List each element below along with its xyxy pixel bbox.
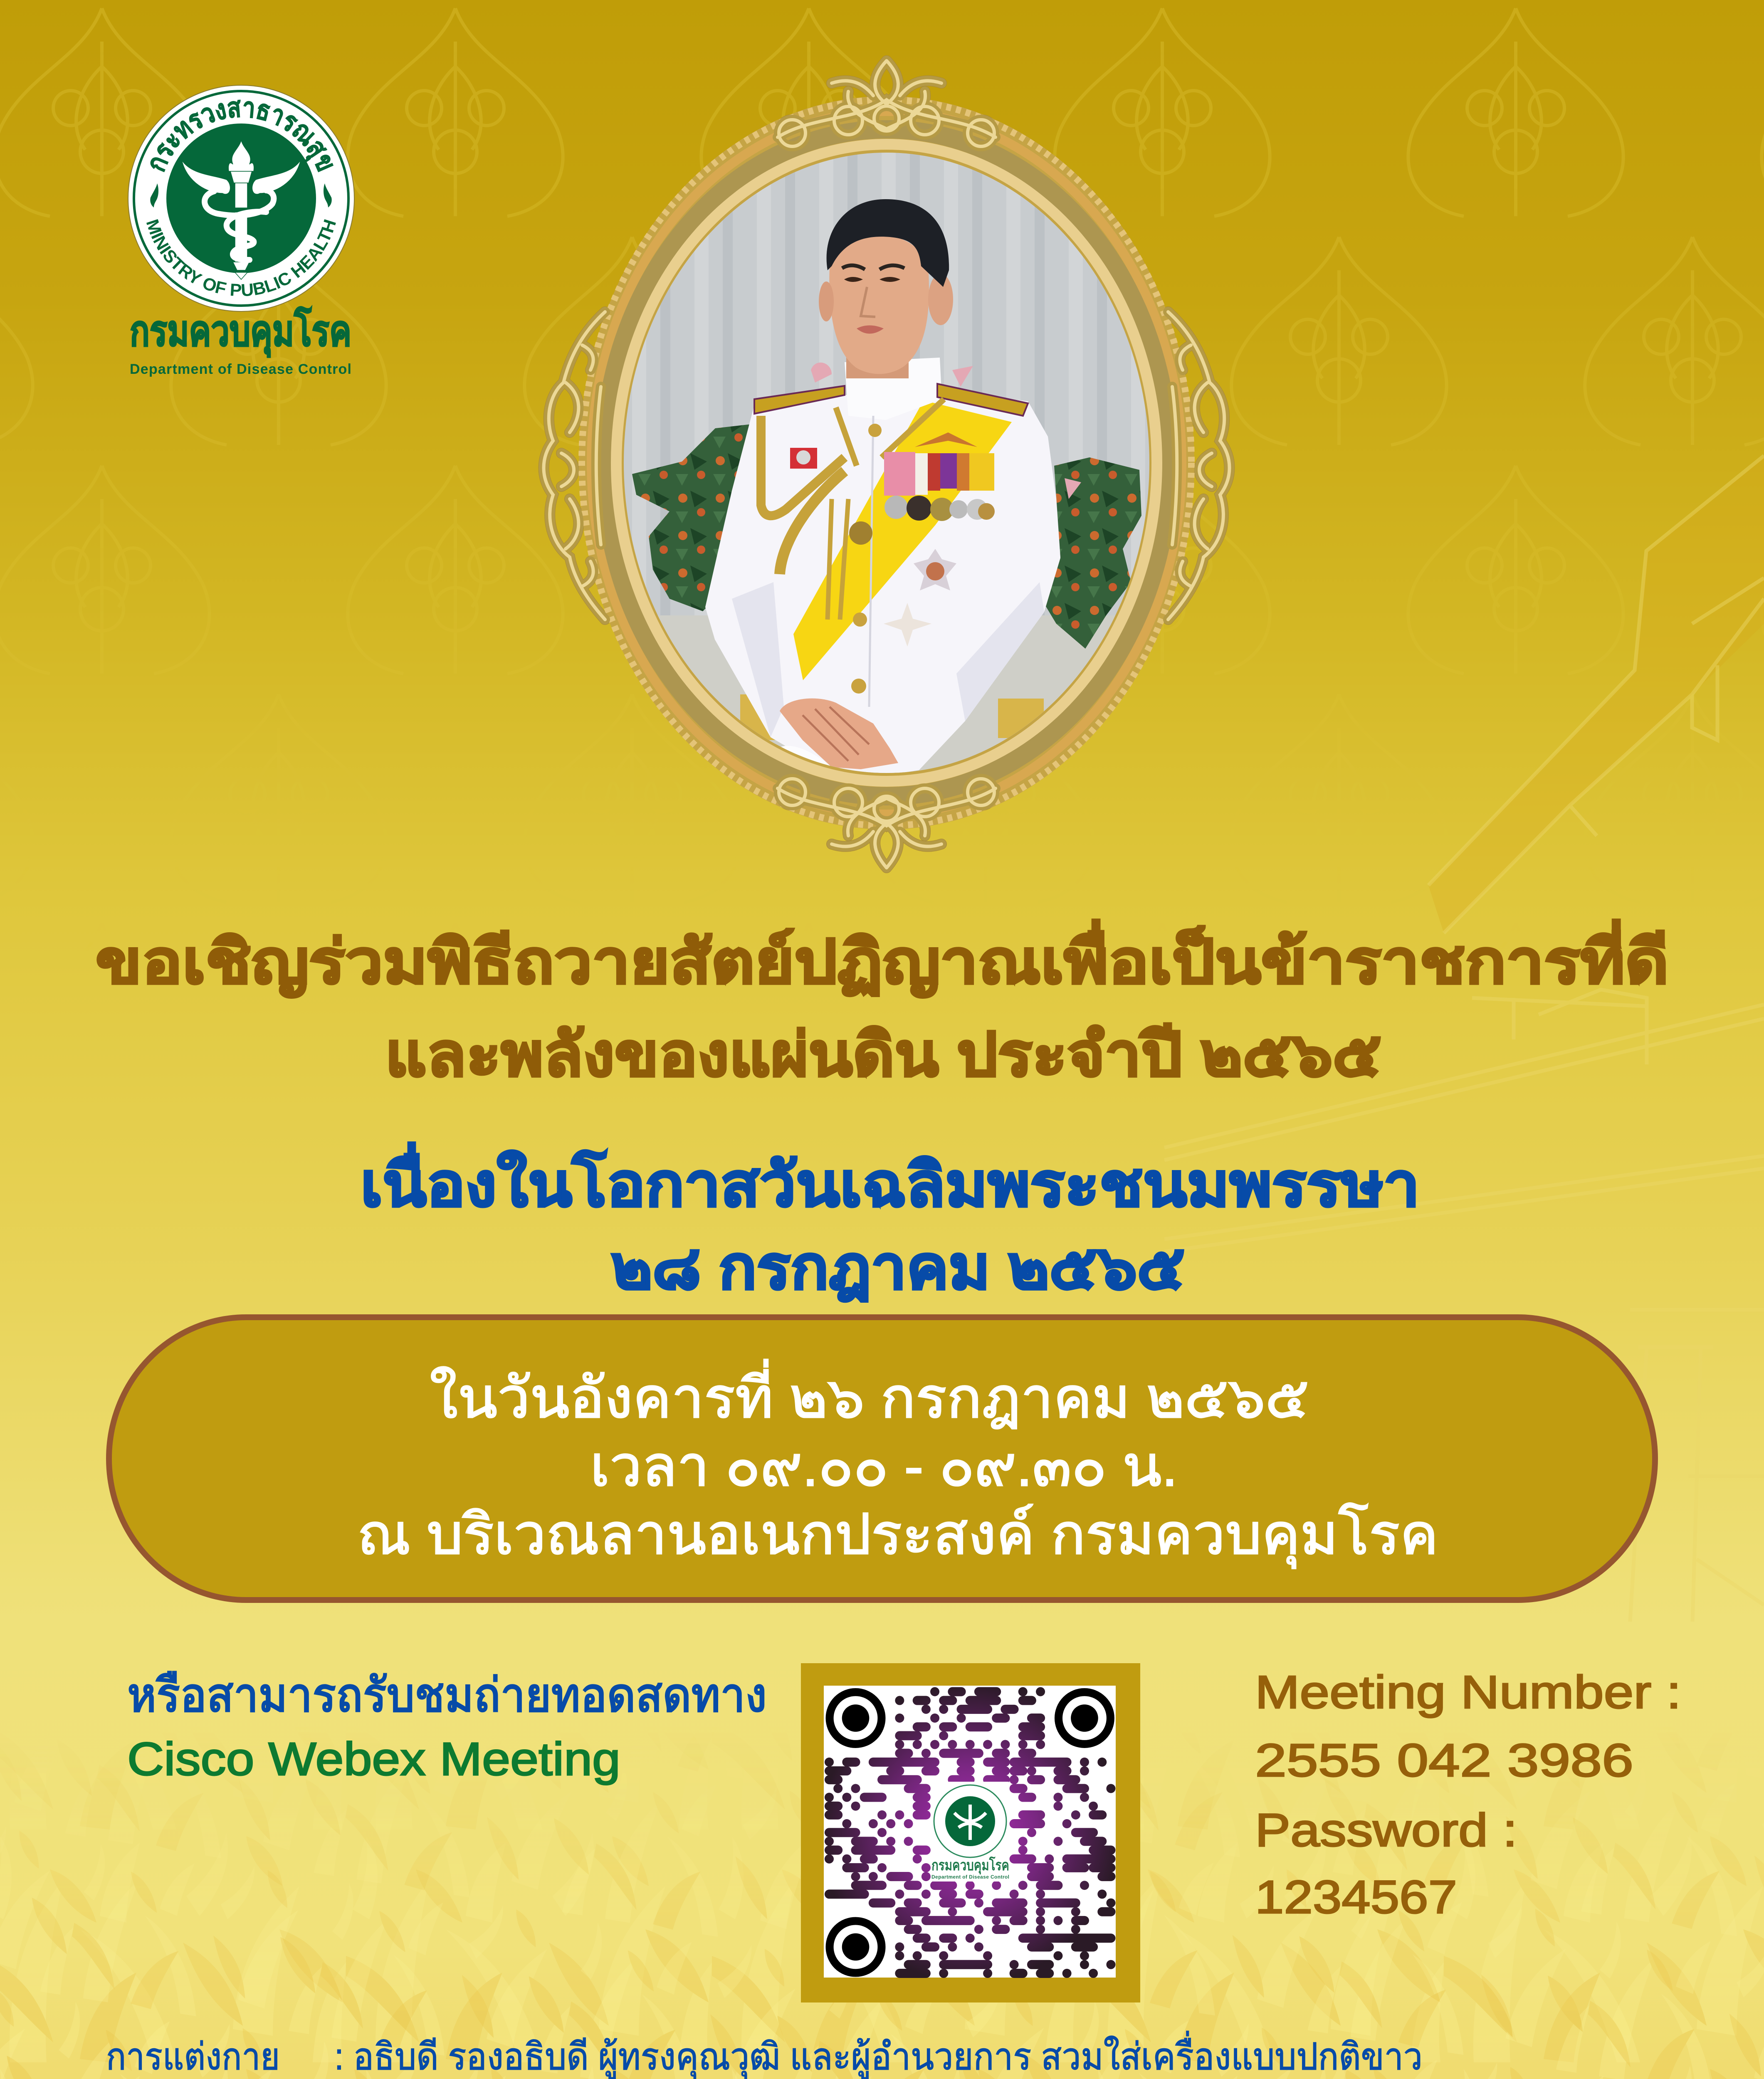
QR centre logo: Department of Disease Control — [931, 1874, 1009, 1880]
QR centre logo: กรมควบคุมโรค — [931, 1856, 1009, 1875]
logo: Ministry of Public Health seal: กระทรวงสาธารณสุข — [140, 91, 342, 175]
medals and ribbons — [849, 432, 995, 545]
text: meeting number and password: Password : — [1255, 1804, 1517, 1856]
panel: date, time and venue pill — [109, 1317, 1655, 1600]
logo: Ministry of Public Health seal: MINISTRY OF PUBLIC HEALTH — [143, 217, 340, 300]
panel: date, time and venue pill: ในวันอังคารที่ ๒๖ กรกฎาคม ๒๕๖๕ — [430, 1359, 1309, 1430]
text block: dress code: การแต่งกาย — [106, 2036, 280, 2078]
text: meeting number and password: 2555 042 3986 — [1255, 1734, 1633, 1786]
hands — [780, 699, 898, 769]
logo: Ministry of Public Health seal — [128, 85, 354, 311]
flowers left — [632, 424, 752, 611]
QR code panel — [801, 1663, 1140, 2002]
logo caption: department name — [130, 306, 351, 377]
icon: winged caduceus — [182, 140, 301, 279]
frame: ornate oval — [544, 61, 1229, 868]
QR centre logo — [931, 1782, 1009, 1881]
heading: ceremony title: และพลังของแผ่นดิน ประจำปี ๒๕๖๕ — [385, 1021, 1381, 1089]
head — [846, 333, 909, 378]
text: meeting number and password — [1255, 1666, 1681, 1923]
subheading: occasion and date: ๒๘ กรกฎาคม ๒๕๖๕ — [611, 1234, 1185, 1302]
text block: dress code — [106, 2031, 1660, 2079]
portrait in oval gold frame — [544, 61, 1229, 868]
subheading: occasion and date: เนื่องในโอกาสวันเฉลิมพระชนมพรรษา — [361, 1142, 1420, 1219]
panel: date, time and venue pill: เวลา ๐๙.๐๐ - ๐๙.๓๐ น. — [590, 1435, 1178, 1498]
text block: dress code: : อธิบดี รองอธิบดี ผู้ทรงคุณวุฒิ และผู้อำนวยการ สวมใส่เครื่องแบบปกติขาว — [334, 2031, 1423, 2079]
text: live broadcast note: หรือสามารถรับชมถ่ายทอดสดทาง — [127, 1669, 767, 1722]
photo: dignitary in white uniform — [615, 146, 1156, 782]
logo caption: department name: กรมควบคุมโรค — [130, 306, 351, 358]
text: meeting number and password: 1234567 — [1255, 1871, 1457, 1923]
text: live broadcast note: Cisco Webex Meeting — [127, 1733, 620, 1785]
heading: ceremony title — [96, 919, 1669, 1089]
flowers right — [1044, 457, 1141, 649]
figure body — [705, 391, 1060, 778]
logo caption: department name: Department of Disease Control — [130, 361, 351, 377]
heading: ceremony title: ขอเชิญร่วมพิธีถวายสัตย์ปฏิญาณเพื่อเป็นข้าราชการที่ดี — [96, 919, 1669, 998]
subheading: occasion and date — [361, 1142, 1420, 1302]
text: live broadcast note — [127, 1669, 767, 1785]
text: meeting number and password: Meeting Number : — [1255, 1666, 1681, 1718]
QR modules — [829, 1691, 1111, 1973]
panel: date, time and venue pill: ณ บริเวณลานอเนกประสงค์ กรมควบคุมโรค — [357, 1503, 1438, 1569]
